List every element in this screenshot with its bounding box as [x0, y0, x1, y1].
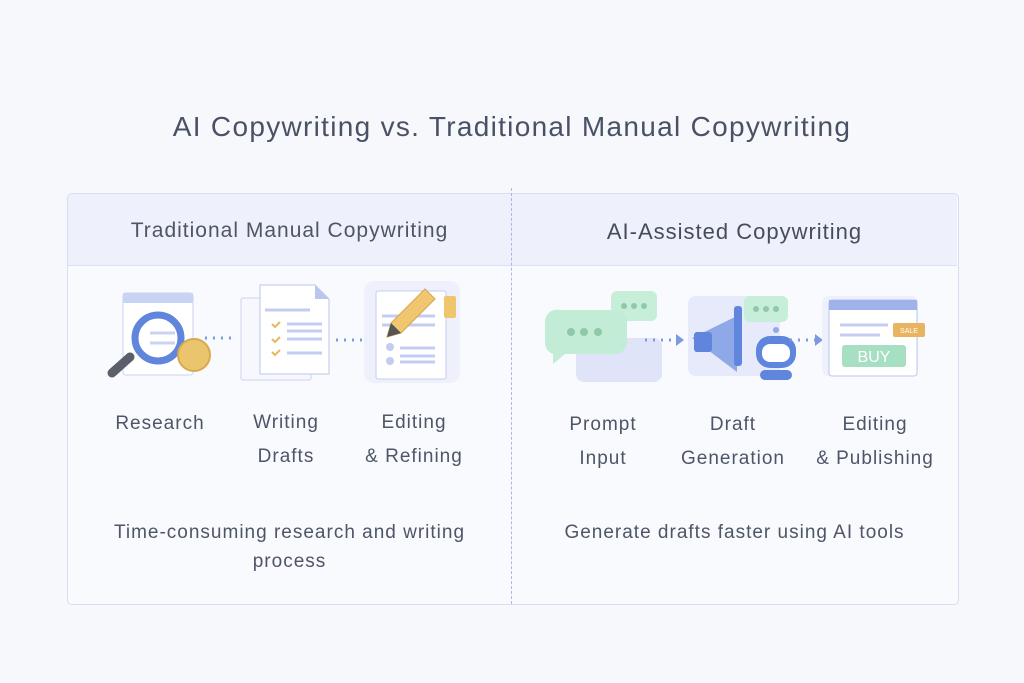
- header band: [68, 194, 957, 266]
- heading: traditional: Traditional Manual Copywriting: [131, 219, 448, 242]
- label: editing publishing: [816, 414, 934, 469]
- icon: publishing: BUY: [858, 349, 891, 366]
- label: research: Research: [115, 413, 205, 434]
- icon: editing: [364, 281, 460, 383]
- label: draft generation: Generation: [681, 448, 785, 469]
- panel: comparison frame: [67, 193, 959, 605]
- arrow: prompt to draft: [645, 334, 684, 346]
- label: prompt input: Input: [579, 448, 627, 469]
- label: editing refining: & Refining: [365, 446, 463, 467]
- label: prompt input: Prompt: [569, 414, 637, 435]
- arrow: draft to publish: [790, 334, 823, 346]
- text: traditional summary: Time-consuming research and writing: [114, 522, 465, 543]
- text: AI summary: Generate drafts faster using AI tools: [564, 522, 905, 543]
- label: draft generation: Draft: [710, 414, 756, 435]
- label: editing publishing: Editing: [842, 414, 908, 435]
- label: draft generation: [681, 414, 785, 469]
- label: prompt input: [569, 414, 637, 469]
- label: writing drafts: Writing: [253, 412, 319, 433]
- label: editing refining: [365, 412, 463, 467]
- heading: AI: AI-Assisted Copywriting: [607, 219, 862, 244]
- divider: [511, 188, 512, 604]
- icon: draft generation: [688, 296, 796, 380]
- text: traditional summary: [114, 522, 465, 572]
- text: traditional summary: process: [253, 551, 326, 572]
- icon: research: [112, 293, 210, 375]
- icon: prompt input: [545, 291, 662, 382]
- label: editing refining: Editing: [381, 412, 447, 433]
- icon: publishing: SALE: [900, 328, 918, 335]
- icon: writing drafts: [241, 285, 329, 380]
- icon: publishing: [822, 296, 925, 376]
- arrow: dotted 2: [336, 338, 363, 342]
- label: editing publishing: & Publishing: [816, 448, 934, 469]
- label: writing drafts: [253, 412, 319, 467]
- label: writing drafts: Drafts: [258, 446, 314, 467]
- title: AI Copywriting vs. Traditional Manual Copywriting: [173, 111, 851, 142]
- arrow: dotted 1: [205, 336, 235, 340]
